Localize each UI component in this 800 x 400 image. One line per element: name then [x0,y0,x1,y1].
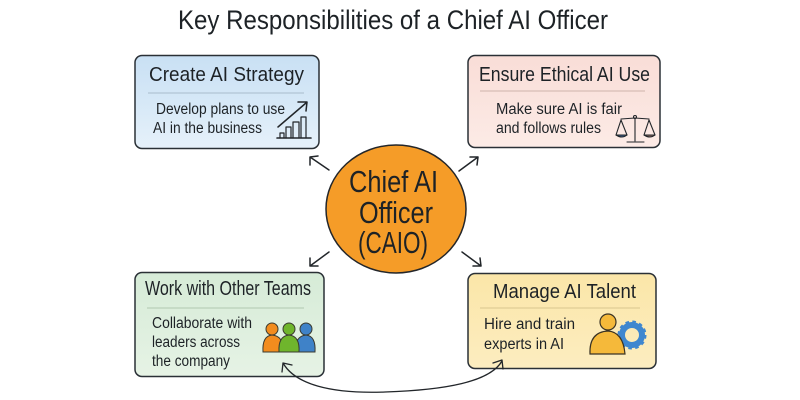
center circle: chief AI officer: (CAIO) [358,225,428,260]
panel: work with other teams [135,272,324,376]
text: ethics description [496,101,622,137]
heading: manage AI talent: Manage AI Talent [493,281,636,303]
text: strategy description: Develop plans to use [156,101,285,118]
heading: ensure ethical AI use: Ensure Ethical AI Use [479,64,650,86]
center circle: chief AI officer: Officer [359,195,433,230]
arrow: center to ethics [459,157,478,171]
heading: create AI strategy: Create AI Strategy [149,64,304,86]
text: strategy description: AI in the business [153,120,262,137]
text: talent description: experts in AI [484,336,564,353]
center circle: chief AI officer [326,145,466,273]
text: talent description [484,316,575,353]
title: Key Responsibilities of a Chief AI Officer [178,5,608,35]
text: ethics description: Make sure AI is fair [496,101,622,118]
heading: work with other teams: Work with Other Teams [145,278,311,300]
text: teams description: Collaborate with [152,315,252,332]
center circle: chief AI officer: Chief AI [349,164,438,199]
panel: ensure ethical AI use [468,56,660,148]
arrow: center to strategy [310,156,329,170]
icon: three people [263,323,315,352]
text: teams description: the company [152,353,230,370]
panel: create AI strategy [135,56,319,148]
arrow: curved link between teams and talent [282,360,503,392]
icon: rising bar chart [277,102,311,138]
arrow: center to teams [310,252,329,266]
text: strategy description [153,101,285,137]
icon: person with gear [590,314,645,354]
icon: balance scales [616,116,655,142]
text: talent description: Hire and train [484,316,575,333]
text: teams description: leaders across [152,334,240,351]
text: teams description [152,315,252,370]
text: ethics description: and follows rules [496,120,601,137]
panel: manage AI talent [468,274,656,368]
arrow: center to talent [462,252,481,266]
